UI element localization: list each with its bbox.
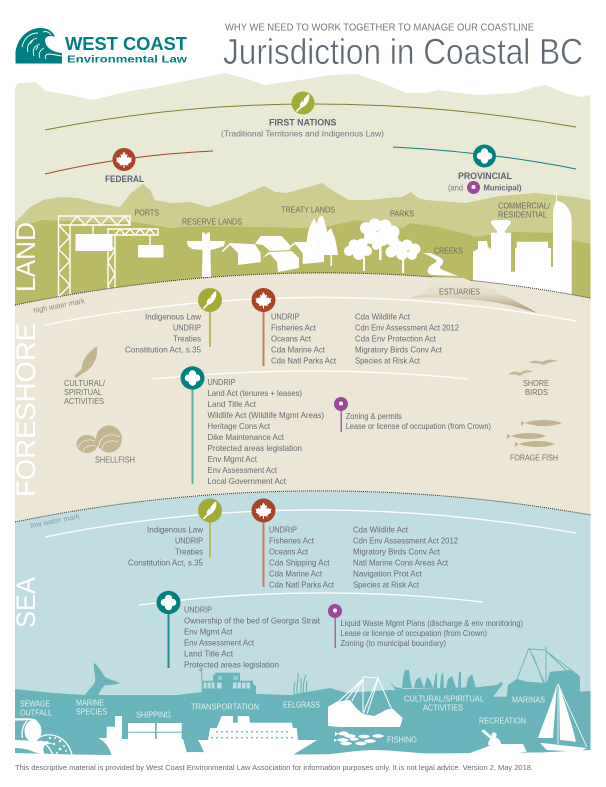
pin: federal [252, 288, 276, 366]
label: marinas: MARINAS [512, 694, 545, 704]
text: provincial laws: UNDRIP [208, 377, 236, 387]
label: commercial residential: COMMERCIAL/ [498, 200, 551, 210]
text: provincial sea laws: UNDRIP [184, 604, 212, 614]
icon: ferry terminal [198, 668, 256, 695]
text: provincial sea laws [184, 604, 321, 670]
text: federal laws: Cda Marine Act [271, 344, 326, 354]
section: First Nations jurisdiction header [45, 92, 576, 138]
icon: fishing boat [328, 677, 403, 727]
pin: municipal sea [328, 604, 342, 648]
text: First Nations sea laws: UNDRIP [175, 536, 203, 546]
text: federal sea laws: Cda Natl Parks Act [269, 580, 335, 590]
icon: city skyline [473, 193, 572, 300]
label: ports: PORTS [134, 208, 159, 218]
label: recreation: RECREATION [479, 716, 526, 726]
text: federal laws: Cdn Env Assessment Act 2012 [355, 322, 459, 332]
subtitle: WHY WE NEED TO WORK TOGETHER TO MANAGE OUR COASTLINE [225, 22, 534, 34]
text: federal sea laws: Navigation Prot Act [353, 568, 423, 578]
text: provincial laws: Heritage Cons Act [208, 421, 271, 431]
text: municipal sea items: Zoning (to municipal boundary) [340, 638, 446, 648]
pin: federal sea [252, 498, 276, 587]
icon: estuaries [410, 277, 537, 313]
icon: sewage outfall [15, 718, 72, 755]
text: federal sea laws: Cda Marine Act [269, 568, 323, 578]
icon: shore birds [508, 360, 558, 376]
icon: wave [16, 28, 62, 64]
sea municipal column [328, 604, 523, 648]
text: federal sea laws: Species at Risk Act [353, 580, 420, 590]
text: provincial laws: Env Mgmt Act [208, 454, 258, 464]
pin: First Nations [198, 288, 222, 347]
side label: foreshore: FORESHORE [11, 323, 41, 497]
logo wordmark: WEST COAST [65, 33, 188, 54]
foreshore provincial arc [153, 371, 468, 379]
icon: cruise ferry [198, 716, 317, 758]
text: provincial laws: Land Act (tenures + leases) [208, 388, 302, 398]
icon: canoe with paddlers [390, 670, 503, 697]
foreshore arc [45, 297, 576, 325]
label: parks: PARKS [390, 208, 414, 218]
label: cultural spiritual activities: CULTURAL/ [64, 378, 106, 388]
label: reserve lands: RESERVE LANDS [182, 216, 242, 226]
text: municipal items: Lease or license of occupation (from Crown) [346, 421, 491, 431]
text: federal laws: UNDRIP [271, 312, 300, 322]
text: federal sea laws: Cda Shipping Act [269, 558, 330, 568]
label: low water mark: low water mark [30, 512, 81, 530]
house 4 [288, 242, 324, 264]
label: shore birds: SHORE [523, 378, 549, 388]
text: municipal sea items: Lease or license of occupation (from Crown) [340, 628, 487, 638]
text: provincial sea laws: Land Title Act [184, 648, 234, 658]
text: municipal sea items: Liquid Waste Mgmt Plans (discharge & env monitoring) [340, 618, 523, 628]
side label: land: LAND [11, 222, 41, 292]
icon: sailboat [538, 684, 587, 752]
pin: federal header [112, 148, 136, 171]
pin: provincial header [473, 144, 496, 168]
panel: seafloor teal band with silhouettes [15, 647, 590, 757]
house 3 [262, 251, 299, 272]
text: federal laws: Cda Wildlife Act [355, 312, 411, 322]
text: federal laws: Migratory Birds Conv Act [355, 344, 443, 354]
label: cultural spiritual activities: ACTIVITIES [64, 396, 104, 406]
arc: provincial [393, 147, 576, 169]
text: provincial laws: Land Title Act [208, 399, 257, 409]
house 1 [222, 243, 261, 265]
label: eelgrass: EELGRASS [283, 700, 320, 710]
text: federal laws: Cda Natl Parks Act [271, 356, 337, 366]
text: federal laws: Oceans Act [271, 334, 312, 344]
pin: First Nations header [292, 92, 314, 114]
icon: container ship [98, 716, 187, 757]
text: First Nations laws: Indigenous Law [145, 312, 202, 322]
foreshore provincial column [180, 366, 324, 486]
icon: shellfish [76, 426, 122, 453]
land labels: RESIDENTIAL [498, 210, 547, 220]
text: federal sea laws: Natl Marine Cons Areas Act [353, 558, 449, 568]
text: First Nations sea laws: Treaties [175, 546, 203, 556]
text: First Nations laws [125, 312, 202, 354]
arc: First Nations [45, 104, 576, 130]
logo subline: Environmental Law [67, 54, 188, 66]
near hills [15, 220, 590, 310]
label: transportation: TRANSPORTATION [191, 702, 259, 712]
label: shellfish: SHELLFISH [95, 454, 135, 464]
label: cultural spiritual activities: SPIRITUAL [64, 387, 102, 397]
caption: and municipal: Municipal) [484, 184, 522, 192]
text: provincial laws: Local Government Act [208, 476, 287, 486]
mid mountains [15, 183, 590, 310]
text: federal laws [271, 312, 459, 366]
text: provincial laws: Protected areas legislation [208, 443, 302, 453]
sea bottom labels: SPECIES [76, 706, 107, 716]
icon: forage fish [507, 420, 562, 447]
heading: First Nations: FIRST NATIONS [269, 116, 336, 128]
label: shore birds [523, 378, 549, 397]
heading: provincial: PROVINCIAL [458, 170, 512, 181]
icon: marina boat [507, 647, 580, 697]
text: provincial sea laws: Ownership of the bed of Georgia Strait [184, 616, 321, 626]
low water dotted line [15, 491, 590, 522]
label: creeks: CREEKS [434, 246, 463, 256]
panel: land background mountains [15, 73, 590, 310]
icon: houses [222, 236, 324, 272]
sea First Nations column [128, 498, 222, 568]
label: marine species: MARINE [76, 698, 104, 708]
panel: foreshore [15, 273, 590, 530]
sea bottom labels: OUTFALL [20, 708, 52, 718]
text: federal sea laws: Oceans Act [269, 546, 309, 556]
land labels [134, 200, 551, 256]
icon: whale tail [85, 663, 120, 695]
section: federal header [45, 148, 213, 184]
sea bottom labels: ACTIVITIES [423, 702, 463, 712]
text: municipal items [346, 411, 491, 431]
side label: sea: SEA [11, 577, 41, 628]
sea federal column [252, 498, 458, 590]
arc: federal [45, 151, 213, 174]
text: provincial sea laws: Protected areas legislation [184, 660, 279, 670]
label: cultural spiritual activities sea: CULTURAL/SPIRITUAL [404, 694, 484, 704]
sea arc [45, 510, 576, 537]
label: estuaries: ESTUARIES [439, 286, 480, 296]
text: federal sea laws: Cda Wildlife Act [353, 524, 409, 534]
label: treaty lands: TREATY LANDS [281, 204, 335, 214]
icon: feather, cultural activities [74, 346, 97, 378]
label: shipping: SHIPPING [136, 710, 171, 720]
icon: creek [423, 253, 458, 276]
sea bottom labels [20, 694, 545, 744]
text: First Nations laws: Treaties [173, 334, 201, 344]
icon: port cranes [58, 216, 164, 300]
house 2 [255, 236, 290, 251]
text: federal laws: Fisheries Act [271, 322, 317, 332]
text: federal sea laws: Fisheries Act [269, 536, 315, 546]
label: shore birds: BIRDS [525, 387, 548, 397]
text: federal sea laws: Cdn Env Assessment Act 2012 [353, 536, 458, 546]
label: high water mark: high water mark [33, 296, 86, 315]
pin: First Nations sea [198, 498, 222, 557]
logo: West Coast Environmental Law [16, 28, 188, 66]
text: First Nations laws: Constitution Act, s.35 [125, 344, 201, 354]
pin: municipal [334, 397, 348, 432]
text: federal laws: Cda Env Protection Act [355, 334, 437, 344]
footer note: This descriptive material is provided by West Coast Environmental Law Association for information purposes only. It is not legal advice. Version 2, May 2018. [15, 763, 533, 772]
icon: eelgrass [294, 673, 307, 696]
text: First Nations sea laws: Constitution Act, s.35 [128, 558, 203, 568]
icon: fish school [334, 731, 384, 745]
icon: round trees [344, 218, 420, 273]
bottom wave white [15, 750, 590, 787]
text: federal sea laws: Migratory Birds Conv Act [353, 546, 441, 556]
text: federal laws: Species at Risk Act [355, 356, 421, 366]
text: First Nations sea laws: Indigenous Law [147, 524, 204, 534]
text: municipal items: Zoning & permits [346, 411, 402, 421]
label: sewage outfall: SEWAGE [20, 698, 50, 708]
sea provincial arc [139, 593, 483, 605]
label: cultural spiritual activities [64, 378, 106, 406]
icon: conifers [306, 216, 338, 266]
heading: federal: FEDERAL [105, 173, 144, 184]
text: provincial laws: Wildlife Act (Wildlife Mgmt Areas) [208, 410, 324, 420]
label: forage fish: FORAGE FISH [510, 452, 558, 462]
icon: kayak [465, 730, 527, 757]
text: provincial laws [208, 377, 324, 486]
foreshore federal column [252, 288, 459, 366]
text: First Nations laws: UNDRIP [173, 322, 201, 332]
text: provincial laws: Dike Maintenance Act [208, 432, 285, 442]
foreshore First Nations column [125, 288, 222, 354]
high water dotted line [15, 273, 590, 305]
text: provincial sea laws: Env Mgmt Act [184, 626, 233, 636]
text: provincial laws: Env Assessment Act [208, 465, 278, 475]
caption: and municipal [448, 181, 522, 194]
caption: and municipal: (and [448, 184, 463, 192]
text: federal sea laws [269, 524, 458, 590]
section: provincial header [393, 144, 576, 194]
panel: sea [15, 491, 590, 755]
pin: provincial [180, 366, 204, 484]
text: First Nations sea laws [128, 524, 204, 568]
sea provincial column [156, 591, 321, 670]
text: provincial sea laws: Env Assessment Act [184, 638, 255, 648]
icon: totem pole [187, 232, 225, 277]
label: fishing: FISHING [387, 734, 417, 744]
text: municipal sea items [340, 618, 523, 648]
foreshore municipal column [334, 397, 491, 432]
caption: traditional territories: (Traditional Territories and Indigenous Law) [221, 128, 384, 138]
pin: provincial sea [156, 591, 180, 668]
text: federal sea laws: UNDRIP [269, 524, 297, 534]
